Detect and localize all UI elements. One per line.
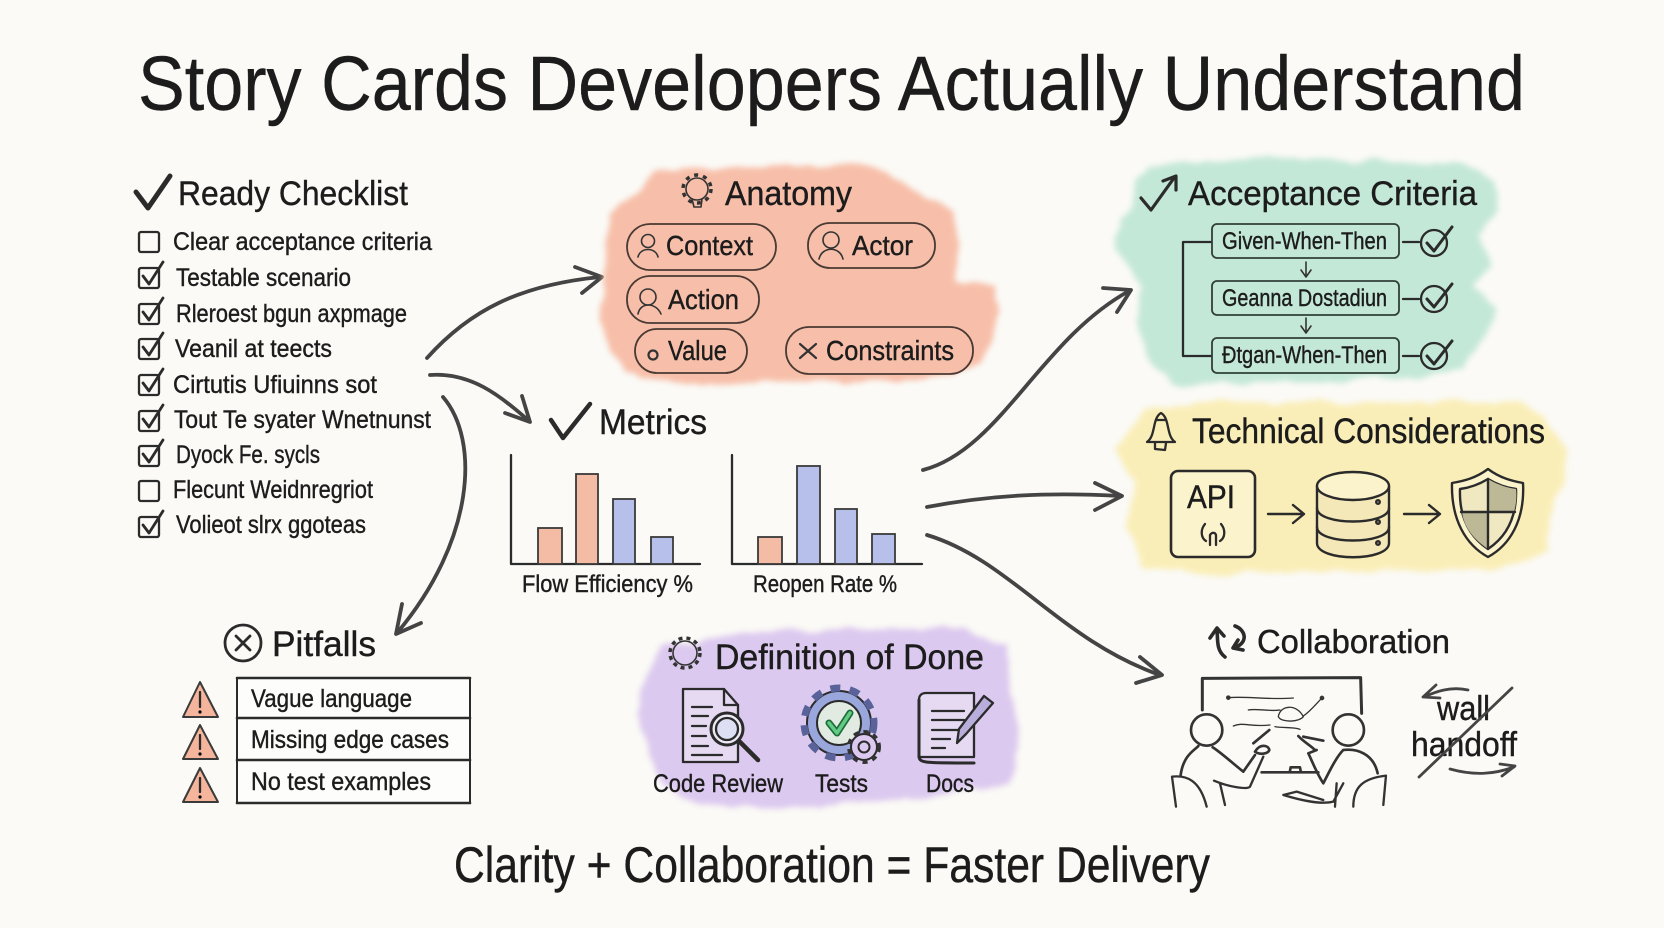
panel background bbox=[641, 630, 1017, 806]
check badge 3 bbox=[1403, 341, 1452, 369]
icon: done gear bbox=[670, 638, 700, 668]
chart: reopen rate bbox=[732, 455, 922, 598]
checklist item 9: Volieot slrx ggoteas bbox=[176, 511, 366, 539]
panel: anatomy bbox=[603, 167, 998, 383]
pill: constraints: Constraints bbox=[826, 335, 954, 366]
panel: ready checklist bbox=[136, 175, 432, 539]
panel: metrics bbox=[511, 403, 922, 598]
panel: acceptance criteria bbox=[1120, 160, 1497, 383]
heading: acceptance criteria: Acceptance Criteria bbox=[1188, 175, 1477, 213]
icon: collaboration cycle bbox=[1210, 626, 1244, 657]
pill: context: Context bbox=[666, 230, 753, 261]
heading: ready checklist: Ready Checklist bbox=[178, 175, 409, 213]
title: Story Cards Developers Actually Understand bbox=[138, 41, 1525, 127]
icon: acceptance check bbox=[1141, 176, 1176, 210]
pitfalls table bbox=[237, 678, 470, 803]
label: docs: Docs bbox=[926, 770, 974, 798]
checklist item 8: Flecunt Weidnregriot bbox=[173, 476, 373, 504]
checklist item 6: Tout Te syater Wnetnunst bbox=[174, 406, 431, 434]
pill: value: Value bbox=[668, 335, 727, 366]
heading: collaboration: Collaboration bbox=[1257, 623, 1450, 660]
checklist item 4: Veanil at teects bbox=[175, 335, 332, 363]
check badge 2 bbox=[1403, 284, 1452, 312]
arrow: database to shield bbox=[1404, 505, 1440, 523]
arrow: checklist to anatomy bbox=[427, 267, 602, 358]
icon: warning 2 bbox=[183, 725, 218, 759]
pill: action: Action bbox=[668, 284, 739, 315]
icon: warning 3 bbox=[183, 768, 218, 802]
icon: API box: API bbox=[1187, 479, 1235, 515]
label: code review: Code Review bbox=[653, 770, 784, 798]
criterion 1: Given-When-Then bbox=[1222, 228, 1387, 255]
criterion 3: Ðtgan-When-Then bbox=[1222, 342, 1387, 369]
panel: technical considerations bbox=[1119, 404, 1565, 572]
icon: x circle bbox=[225, 625, 261, 661]
pitfalls table: No test examples bbox=[251, 768, 431, 796]
panel background bbox=[1120, 160, 1497, 383]
icon: docs and pencil bbox=[919, 693, 993, 763]
arrow: metrics to acceptance criteria bbox=[923, 288, 1131, 470]
flow bracket bbox=[1183, 242, 1212, 356]
checklist item 1: Clear acceptance criteria bbox=[173, 228, 432, 256]
icon: API box bbox=[1171, 471, 1255, 557]
arrow: checklist to metrics bbox=[430, 375, 530, 422]
pill: actor bbox=[808, 223, 935, 268]
illustration: two people at whiteboard bbox=[1172, 678, 1386, 807]
icon: metrics check bbox=[551, 404, 590, 438]
panel: collaboration bbox=[1172, 623, 1518, 807]
checklist item 3: Rleroest bgun axpmage bbox=[176, 300, 407, 328]
icon: heading check bbox=[136, 176, 170, 208]
arrow: metrics to technical considerations bbox=[927, 483, 1122, 510]
icon: database bbox=[1317, 472, 1389, 557]
icon: bell bbox=[1147, 413, 1175, 450]
crossed out text: wall handoff: wall bbox=[1436, 690, 1490, 728]
chart: flow efficiency: Flow Efficiency % bbox=[522, 571, 693, 598]
chart: flow efficiency bbox=[511, 455, 700, 598]
pill: action bbox=[627, 276, 759, 323]
check badge 1 bbox=[1403, 227, 1452, 256]
panel: definition of done bbox=[641, 630, 1017, 806]
pitfalls table: Vague language bbox=[251, 685, 412, 713]
checklist item 2: Testable scenario bbox=[176, 264, 351, 292]
icon: tests gear bbox=[804, 688, 879, 762]
heading: pitfalls: Pitfalls bbox=[272, 625, 376, 664]
panel background bbox=[603, 167, 998, 383]
checklist item 5: Cirtutis Ufiuinns sot bbox=[173, 371, 377, 399]
flow arrow 1 bbox=[1301, 262, 1311, 277]
panel: pitfalls bbox=[183, 625, 470, 803]
flow arrow 2 bbox=[1301, 318, 1311, 333]
pill: value bbox=[635, 329, 747, 373]
crossed out text: wall handoff: handoff bbox=[1411, 726, 1518, 764]
criterion 2 bbox=[1212, 281, 1399, 315]
icon: shield bbox=[1452, 469, 1523, 557]
panel background bbox=[1119, 404, 1565, 572]
label: tests: Tests bbox=[815, 770, 868, 798]
icon: anatomy gear bbox=[683, 175, 711, 207]
icon: warning 1 bbox=[183, 682, 218, 717]
pill: context bbox=[627, 224, 776, 270]
pill: constraints bbox=[786, 327, 973, 374]
heading: metrics: Metrics bbox=[599, 403, 707, 442]
arrow: API to database bbox=[1268, 505, 1304, 523]
heading: anatomy: Anatomy bbox=[725, 175, 852, 213]
arrow: metrics to collaboration bbox=[927, 535, 1162, 683]
heading: definition of done: Definition of Done bbox=[715, 638, 984, 677]
tagline: Clarity + Collaboration = Faster Delivery bbox=[454, 837, 1210, 893]
criterion 1 bbox=[1212, 224, 1399, 258]
pill: actor: Actor bbox=[852, 230, 913, 261]
criterion 3 bbox=[1212, 338, 1399, 373]
chart: reopen rate: Reopen Rate % bbox=[753, 571, 897, 598]
checklist item 7 bbox=[139, 440, 320, 469]
icon: code review bbox=[683, 689, 758, 762]
criterion 2: Geanna Dostadiun bbox=[1222, 285, 1387, 312]
checklist item 7: Dyock Fe. sycls bbox=[176, 441, 320, 469]
pitfalls table: Missing edge cases bbox=[251, 726, 449, 754]
crossed out text: wall handoff bbox=[1411, 685, 1518, 777]
heading: technical considerations: Technical Considerations bbox=[1192, 412, 1545, 451]
arrow: checklist to pitfalls bbox=[396, 397, 465, 634]
